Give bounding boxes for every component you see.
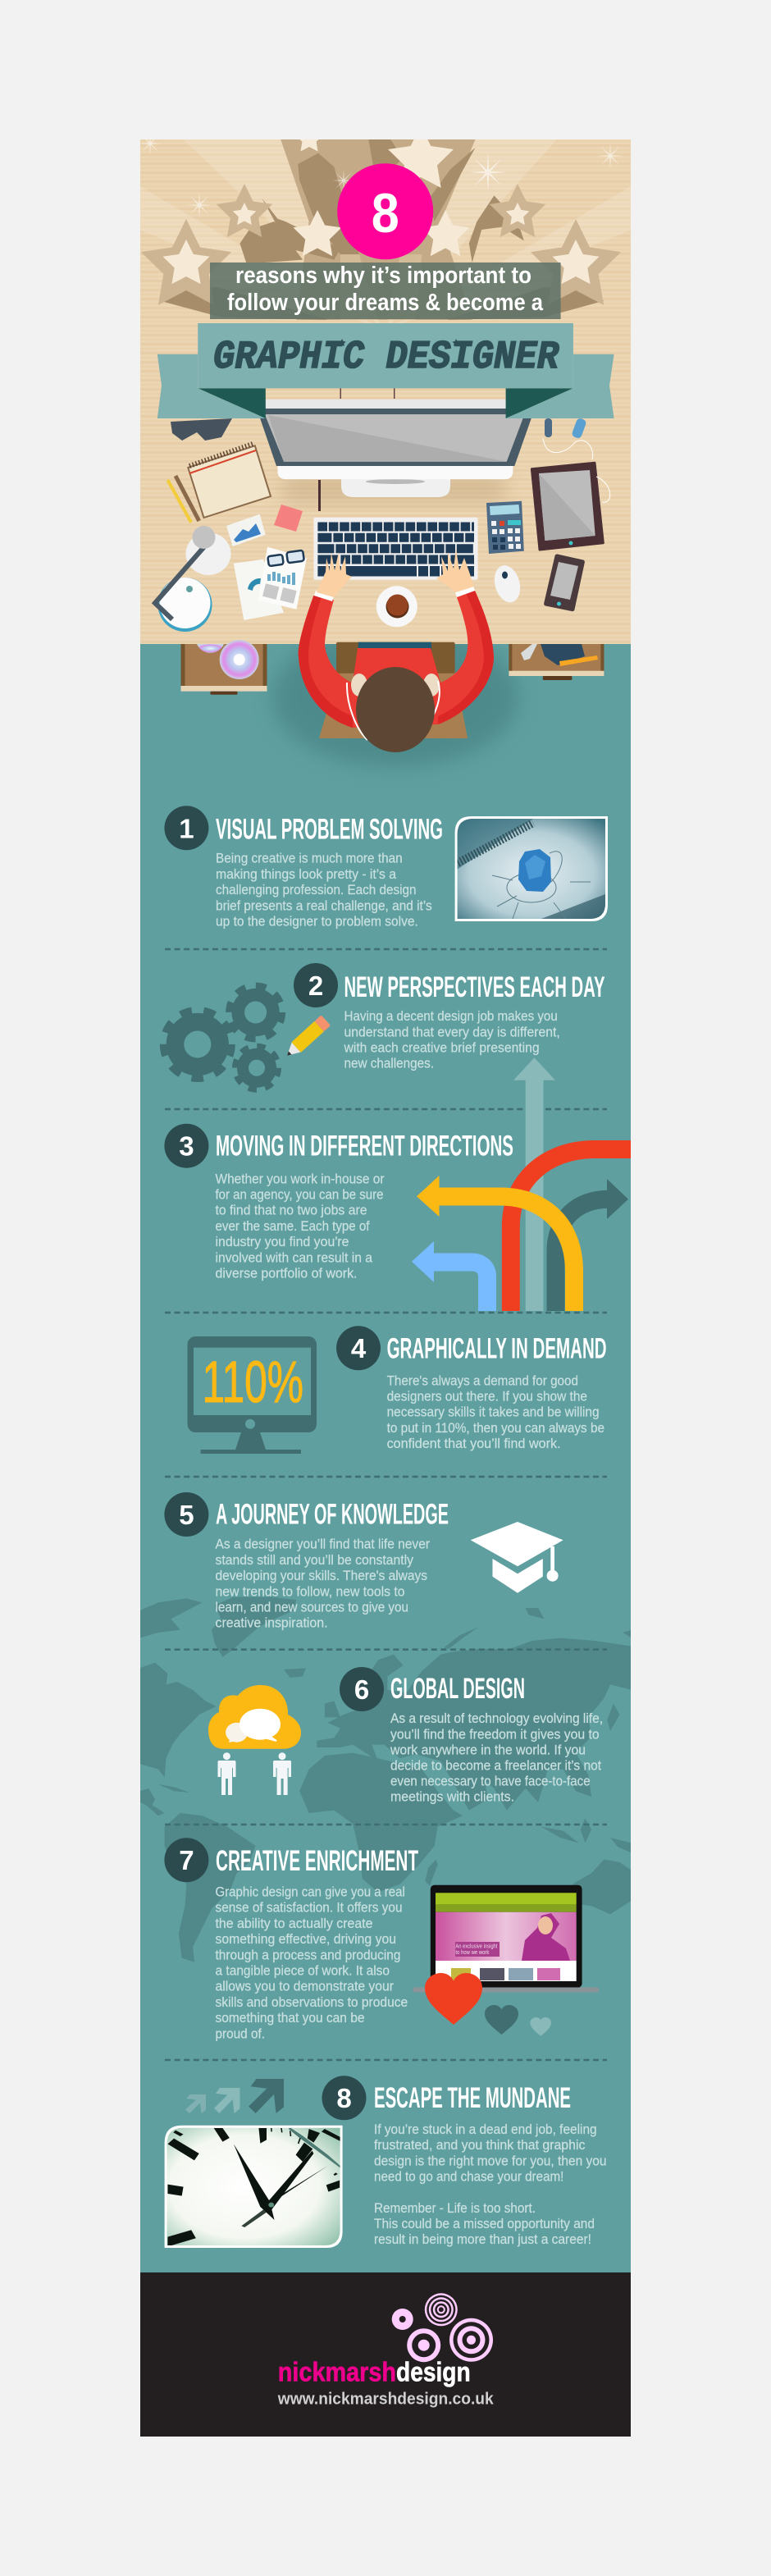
- panel: reason 1: [164, 806, 608, 929]
- body text 7: the ability to actually create: [215, 1916, 372, 1931]
- body text 7: something that you can be: [215, 2011, 364, 2026]
- left drawer with CDs: [180, 640, 267, 695]
- title text block: follow your dreams & become a: [227, 290, 544, 316]
- body text 8: [374, 2122, 607, 2247]
- heading 7: CREATIVE ENRICHMENT: [216, 1845, 418, 1877]
- body text 8: result in being more than just a career!: [374, 2232, 591, 2247]
- body text 2: new challenges.: [344, 1057, 434, 1071]
- game controller: [171, 418, 232, 441]
- heading 1: VISUAL PROBLEM SOLVING: [216, 814, 443, 846]
- sticky note: [274, 505, 303, 532]
- body text 3: Whether you work in-house or: [215, 1172, 385, 1186]
- panel: reason 8: [165, 2076, 607, 2248]
- body text 8: This could be a missed opportunity and: [374, 2217, 595, 2231]
- pencils: [167, 476, 199, 523]
- body text 5: As a designer you’ll find that life never: [215, 1537, 430, 1552]
- body text 6: [390, 1711, 603, 1805]
- title badge: number 8: [337, 163, 433, 259]
- body text 3: to find that no two jobs are: [215, 1204, 367, 1218]
- stars: [141, 125, 621, 305]
- headphones: [543, 418, 593, 459]
- body text 7: allows you to demonstrate your: [215, 1980, 394, 1994]
- body text 2: understand that every day is different,: [344, 1025, 560, 1039]
- chair: [319, 642, 468, 738]
- body text 6: even necessary to have face-to-face: [390, 1774, 591, 1789]
- panel: reason 7: [164, 1838, 600, 2041]
- heading 5: A JOURNEY OF KNOWLEDGE: [216, 1498, 449, 1530]
- number badge 7: 7: [179, 1845, 194, 1875]
- website address: www.nickmarshdesign.co.uk: [277, 2391, 495, 2409]
- body text 8: Remember - Life is too short.: [374, 2201, 536, 2216]
- body text 8: need to go and chase your dream!: [374, 2170, 563, 2185]
- body text 1: up to the designer to problem solve.: [216, 914, 418, 929]
- number badge 5: 5: [179, 1500, 194, 1530]
- body text 6: decide to become a freelancer it’s not: [390, 1759, 601, 1774]
- body text 8: If you’re stuck in a dead end job, feeling: [374, 2122, 597, 2137]
- heading 6: GLOBAL DESIGN: [390, 1673, 525, 1705]
- body text 3: industry you find you're: [215, 1235, 349, 1249]
- body text 5: creative inspiration.: [215, 1616, 328, 1631]
- panel: reason 4: [187, 1326, 607, 1454]
- body text 4: designers out there. If you show the: [387, 1390, 587, 1404]
- title text block: reasons why it’s important to: [235, 263, 531, 289]
- panel: reason 3: [164, 1057, 636, 1311]
- title: Graphic Designer: GRAPHIC DESIGNER: [213, 336, 559, 380]
- body text 7: a tangible piece of work. It also: [215, 1963, 390, 1978]
- body text 3: [215, 1172, 385, 1281]
- body text 5: learn, and new sources to give you: [215, 1600, 408, 1615]
- hands: [317, 549, 474, 597]
- panel: teal body background: [140, 644, 631, 2272]
- laptop with website: [413, 1885, 600, 1992]
- logo: concentric circles: [392, 2293, 493, 2362]
- body text 7: skills and observations to produce: [215, 1995, 408, 2010]
- tablet: [531, 463, 610, 550]
- number badge 4: [336, 1326, 381, 1370]
- body text 4: to put in 110%, then you can always be: [387, 1421, 604, 1436]
- icon: two people: [218, 1752, 291, 1795]
- headphones on head: [347, 674, 440, 740]
- body text 2: with each creative brief presenting: [344, 1041, 540, 1056]
- floor shadow under designer: [272, 628, 518, 767]
- body text 1: [216, 852, 432, 929]
- documents and glasses: [234, 547, 307, 620]
- number badge 5: [164, 1492, 208, 1537]
- body text 7: Graphic design can give you a real: [215, 1885, 405, 1900]
- sparkles: [140, 139, 622, 217]
- body text 6: work anywhere in the world. If you: [390, 1742, 586, 1757]
- banner ribbon: [157, 323, 614, 418]
- shirt cuffs: [314, 586, 475, 601]
- body text 7: proud of.: [215, 2026, 265, 2041]
- body text 7: through a process and producing: [215, 1948, 400, 1962]
- monitor shadow on desk: [283, 472, 504, 503]
- calculator: [486, 501, 524, 554]
- body text 5: [215, 1537, 430, 1631]
- heading 3: MOVING IN DIFFERENT DIRECTIONS: [216, 1130, 513, 1162]
- heading 4: GRAPHICALLY IN DEMAND: [387, 1333, 607, 1365]
- body text 3: diverse portfolio of work.: [215, 1266, 358, 1281]
- number badge 2: 2: [308, 971, 323, 1001]
- body text 6: As a result of technology evolving life,: [390, 1711, 603, 1726]
- body text 3: for an agency, you can be sure: [215, 1188, 384, 1203]
- coffee cup: [376, 586, 417, 627]
- body text 8: frustrated, and you think that graphic: [374, 2138, 585, 2153]
- laptop with website: to how we work: [455, 1948, 490, 1956]
- laptop with website: An exclusive insight: [455, 1943, 498, 1949]
- sunburst rays and star extrusions: [139, 139, 632, 331]
- body text 5: new trends to follow, new tools to: [215, 1584, 405, 1599]
- number badge 1: [164, 806, 208, 850]
- panel: reason 5: [164, 1492, 563, 1631]
- body text 1: challenging profession. Each design: [216, 883, 417, 897]
- up-right arrows: [185, 2079, 284, 2113]
- icon: graduation cap: [471, 1522, 563, 1593]
- direction arrows graphic: [412, 1057, 636, 1311]
- number badge 3: [164, 1124, 208, 1168]
- body text 4: necessary skills it takes and be willing: [387, 1405, 600, 1420]
- photo: clock face: [165, 2126, 343, 2248]
- panel: header illustration: [139, 125, 632, 644]
- panel: footer: [140, 2272, 631, 2437]
- divider lines: [165, 949, 607, 2060]
- body text 2: [344, 1009, 560, 1071]
- head: [356, 667, 435, 752]
- body text 4: There's always a demand for good: [387, 1373, 578, 1388]
- body text 1: Being creative is much more than: [216, 852, 403, 866]
- body text 3: ever the same. Each type of: [215, 1219, 370, 1234]
- keyboard: [313, 518, 478, 580]
- body text 7: [215, 1885, 408, 2041]
- number badge 3: 3: [179, 1130, 194, 1162]
- number badge 8: 8: [336, 2083, 352, 2113]
- number badge 4: 4: [351, 1333, 367, 1363]
- body text 2: Having a decent design job makes you: [344, 1009, 558, 1024]
- computer mouse: [494, 565, 520, 602]
- panel: reason 6: [208, 1667, 603, 1805]
- body text 4: [387, 1373, 604, 1451]
- panel: reason 2: [164, 963, 605, 1089]
- body text 7: something effective, driving you: [215, 1932, 396, 1947]
- body text 1: brief presents a real challenge, and it’s: [216, 898, 432, 913]
- body text 3: involved with can result in a: [215, 1250, 373, 1265]
- body text 6: you’ll find the freedom it gives you to: [390, 1727, 600, 1742]
- body text 6: meetings with clients.: [390, 1790, 514, 1805]
- title text block: [210, 263, 561, 319]
- monitor icon with 110%: [187, 1336, 317, 1454]
- gears icon: [164, 986, 282, 1089]
- arms and torso: [299, 591, 494, 728]
- desk: cables above monitor: [340, 388, 395, 399]
- right drawer with cards: [509, 644, 604, 680]
- smartphone: [546, 556, 582, 610]
- body text 8: design is the right move for you, then you: [374, 2154, 607, 2168]
- number badge 8: [322, 2076, 366, 2120]
- pencil icon: [282, 1015, 331, 1061]
- number badge 7: [164, 1838, 208, 1882]
- number badge 1: 1: [179, 814, 194, 843]
- chart card: [226, 514, 266, 546]
- logo wordmark: design: [396, 2357, 471, 2387]
- title badge: number 8: 8: [372, 182, 399, 244]
- photo: crumpled paper lightbulb sketch: [455, 816, 608, 921]
- heading 8: ESCAPE THE MUNDANE: [374, 2082, 571, 2114]
- body text 5: developing your skills. There's always: [215, 1569, 427, 1583]
- desk lamp: [155, 526, 231, 632]
- logo wordmark: nickmarsh: [278, 2357, 396, 2387]
- number badge 6: 6: [354, 1674, 369, 1705]
- hearts: [425, 1973, 551, 2036]
- body text 5: stands still and you’ll be constantly: [215, 1553, 414, 1568]
- number badge 6: [340, 1667, 384, 1711]
- body text 1: making things look pretty - it’s a: [216, 867, 397, 882]
- body text 7: sense of satisfaction. It offers you: [215, 1901, 402, 1916]
- world map backdrop: [139, 1597, 632, 1962]
- designer figure at desk: [299, 549, 494, 752]
- notebook: [188, 444, 271, 518]
- number badge 2: [294, 963, 338, 1007]
- icon: cloud with speech bubbles: [208, 1685, 301, 1749]
- monitor: [257, 400, 535, 511]
- body text 4: confident that you’ll find work.: [387, 1436, 561, 1451]
- monitor icon with 110%: 110%: [202, 1350, 303, 1415]
